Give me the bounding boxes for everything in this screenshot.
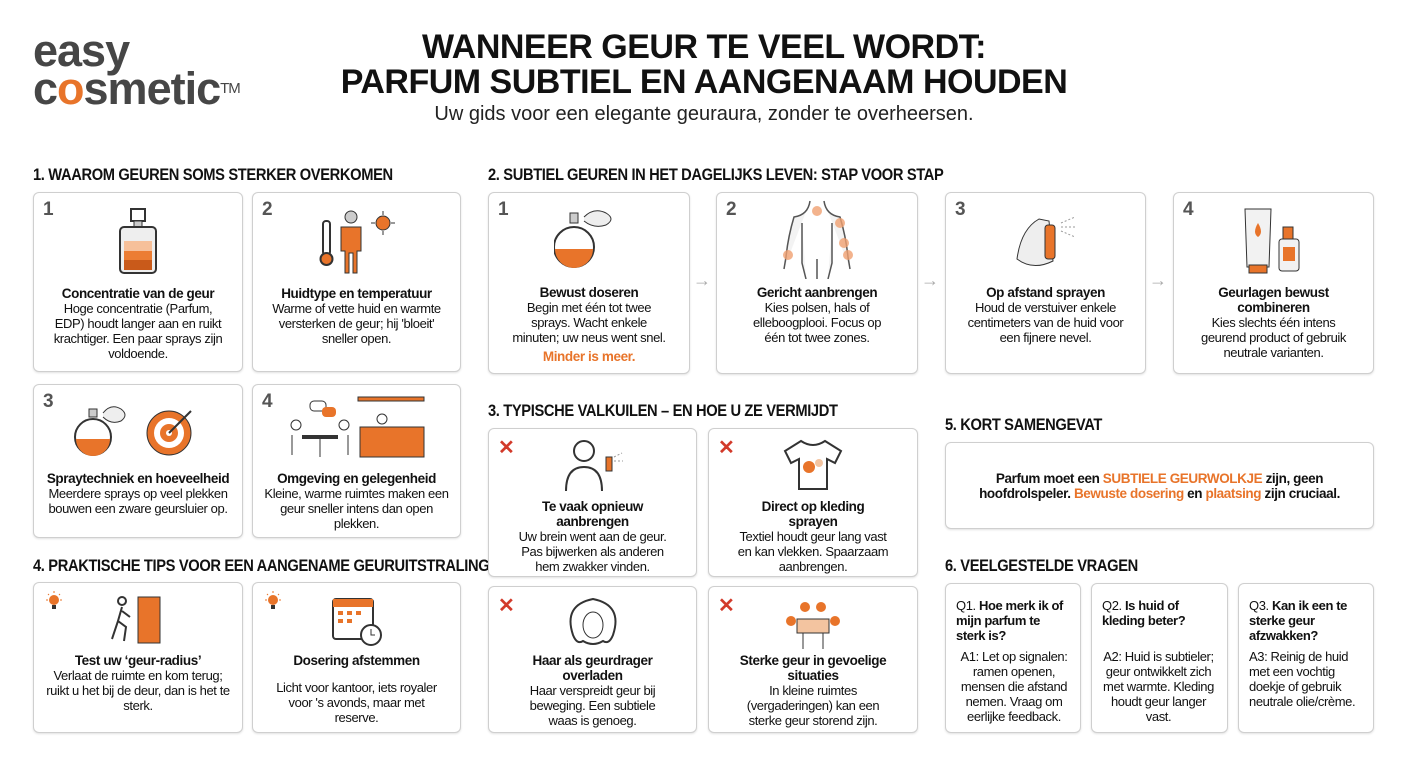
icon: round spray bottle	[554, 210, 612, 268]
step 3: Houd de verstuiver enkele centimeters van de huid voor een fijnere nevel.	[968, 300, 1123, 345]
card 1.4: Kleine, warme ruimtes maken een geur sneller intens dan open plekken.	[264, 486, 449, 531]
icon: person spraying	[565, 440, 623, 491]
summary box: Parfum moet een SUBTIELE GEURWOLKJE zijn, geen hoofdrolspeler. Bewuste dosering en plaatsing zijn cruciaal.	[979, 471, 1340, 501]
icon: tube and bottle	[1244, 208, 1300, 274]
step 2: Gericht aanbrengen	[757, 285, 877, 300]
heading: section 6: 6. VEELGESTELDE VRAGEN	[945, 557, 1138, 575]
pitfall 2: Direct op kleding sprayen	[762, 499, 864, 529]
faq 2	[1091, 583, 1228, 733]
card 1.3	[33, 384, 243, 538]
faq 3: A3: Reinig de huid met een vochtig doekje of gebruik neutrale olie/crème.	[1249, 649, 1355, 709]
card 1.4: Omgeving en gelegenheid	[277, 471, 436, 486]
pitfall 3: ✕	[498, 595, 515, 617]
card 4.2: Licht voor kantoor, iets royaler voor 's avonds, maar met reserve.	[276, 680, 437, 725]
pitfall 1: Uw brein went aan de geur. Pas bijwerken als anderen hem zwakker vinden.	[519, 529, 666, 574]
card 1.1: Hoge concentratie (Parfum, EDP) houdt langer aan en ruikt krachtiger. Een paar sprays zijn voldoende.	[54, 301, 222, 361]
card 1.4: 4	[262, 391, 273, 412]
icon: body with zones	[783, 200, 853, 279]
card 1.1	[33, 192, 243, 372]
step 3: 3	[955, 199, 966, 220]
pitfall 2: ✕	[718, 437, 735, 459]
heading: section 5: 5. KORT SAMENGEVAT	[945, 416, 1102, 434]
card 1.3: Spraytechniek en hoeveelheid	[47, 471, 229, 486]
faq 2: Q2. Is huid of kleding beter?	[1102, 598, 1185, 628]
card 4.1	[33, 582, 243, 733]
heading: section 4: 4. PRAKTISCHE TIPS VOOR EEN AANGENAME GEURUITSTRALING	[33, 557, 489, 575]
card 1.1: 1	[43, 199, 54, 220]
step 1: Bewust doseren	[540, 285, 638, 300]
summary box	[945, 442, 1374, 529]
faq 3	[1238, 583, 1374, 733]
card 4.1: Test uw ‘geur-radius’	[75, 653, 201, 668]
arrow: →	[921, 270, 939, 290]
icon: hair	[570, 598, 616, 645]
pitfall 4: In kleine ruimtes (vergaderingen) kan een sterke geur storend zijn.	[747, 683, 879, 728]
icon: person leaving door	[111, 596, 160, 644]
pitfall 3	[488, 586, 697, 733]
pitfall 1	[488, 428, 697, 577]
icon: person heat	[320, 210, 395, 274]
pitfall 4	[708, 586, 918, 733]
icon: calendar clock	[332, 598, 382, 646]
icon: bulb	[265, 591, 281, 609]
pitfall 4: Sterke geur in gevoelige situaties	[740, 653, 886, 683]
step 3: Op afstand sprayen	[986, 285, 1105, 300]
step 4: 4	[1183, 199, 1194, 220]
pitfall 4: ✕	[718, 595, 735, 617]
step 2: 2	[726, 199, 737, 220]
logo: easy	[33, 25, 129, 76]
step 1	[488, 192, 690, 374]
icon: bulb	[46, 591, 62, 609]
card 1.1: Concentratie van de geur	[62, 286, 214, 301]
pitfall 3: Haar verspreidt geur bij beweging. Een subtiele waas is genoeg.	[530, 683, 655, 728]
faq 1	[945, 583, 1081, 733]
arrow: →	[1149, 270, 1167, 290]
icon: shirt with stain	[784, 440, 842, 490]
card 4.2: Dosering afstemmen	[293, 653, 420, 668]
faq 3: Q3. Kan ik een te sterke geur afzwakken?	[1249, 598, 1347, 643]
step 4: Kies slechts één intens geurend product of gebruik neutrale varianten.	[1201, 315, 1346, 360]
faq 2: A2: Huid is subtieler; geur ontwikkelt zich met warmte. Kleding houdt geur langer vast.	[1103, 649, 1214, 724]
step 1: Minder is meer.	[543, 349, 635, 364]
step 2	[716, 192, 918, 374]
icon: meeting	[786, 602, 840, 649]
icon: people and bar	[290, 396, 424, 458]
card 1.2: 2	[262, 199, 273, 220]
step 4: Geurlagen bewust combineren	[1218, 285, 1329, 315]
pitfall 1: ✕	[498, 437, 515, 459]
step 1: 1	[498, 199, 509, 220]
faq 1: A1: Let op signalen: ramen openen, mensen die afstand nemen. Vraag om eerlijke feedback.	[961, 649, 1067, 724]
step 3	[945, 192, 1146, 374]
icon: perfume bottle	[119, 208, 157, 274]
card 1.2: Warme of vette huid en warmte versterken de geur; hij 'bloeit' sneller open.	[272, 301, 441, 346]
card 1.3: Meerdere sprays op veel plekken bouwen een zware geursluier op.	[48, 486, 228, 516]
icon: spray and target	[74, 406, 192, 456]
step 4	[1173, 192, 1374, 374]
icon: hand spraying	[1016, 217, 1075, 266]
pitfall 2	[708, 428, 918, 577]
step 1: Begin met één tot twee sprays. Wacht enkele minuten; uw neus went snel.	[512, 300, 666, 345]
pitfall 3: Haar als geurdrager overladen	[533, 653, 652, 683]
card 1.3: 3	[43, 391, 54, 412]
card 1.2	[252, 192, 461, 372]
card 1.2: Huidtype en temperatuur	[281, 286, 432, 301]
title: PARFUM SUBTIEL EN AANGENAAM HOUDEN	[341, 63, 1067, 101]
card 1.4	[252, 384, 461, 538]
card 4.2	[252, 582, 461, 733]
faq 1: Q1. Hoe merk ik of mijn parfum te sterk is?	[956, 598, 1063, 643]
pitfall 1: Te vaak opnieuw aanbrengen	[542, 499, 643, 529]
heading: section 2: 2. SUBTIEL GEUREN IN HET DAGELIJKS LEVEN: STAP VOOR STAP	[488, 166, 943, 184]
step 2: Kies polsen, hals of elleboogplooi. Focus op één tot twee zones.	[753, 300, 881, 345]
logo	[33, 25, 240, 114]
pitfall 2: Textiel houdt geur lang vast en kan vlekken. Spaarzaam aanbrengen.	[738, 529, 888, 574]
subtitle: Uw gids voor een elegante geuraura, zonder te overheersen.	[434, 103, 974, 125]
card 4.1: Verlaat de ruimte en kom terug; ruikt u het bij de deur, dan is het te sterk.	[46, 668, 230, 713]
title	[341, 28, 1067, 101]
arrow: →	[693, 270, 711, 290]
title: WANNEER GEUR TE VEEL WORDT:	[422, 28, 986, 66]
logo: cosmeticTM	[33, 63, 240, 114]
heading: section 3: 3. TYPISCHE VALKUILEN – EN HOE U ZE VERMIJDT	[488, 402, 838, 420]
heading: section 1: 1. WAAROM GEUREN SOMS STERKER OVERKOMEN	[33, 166, 393, 184]
